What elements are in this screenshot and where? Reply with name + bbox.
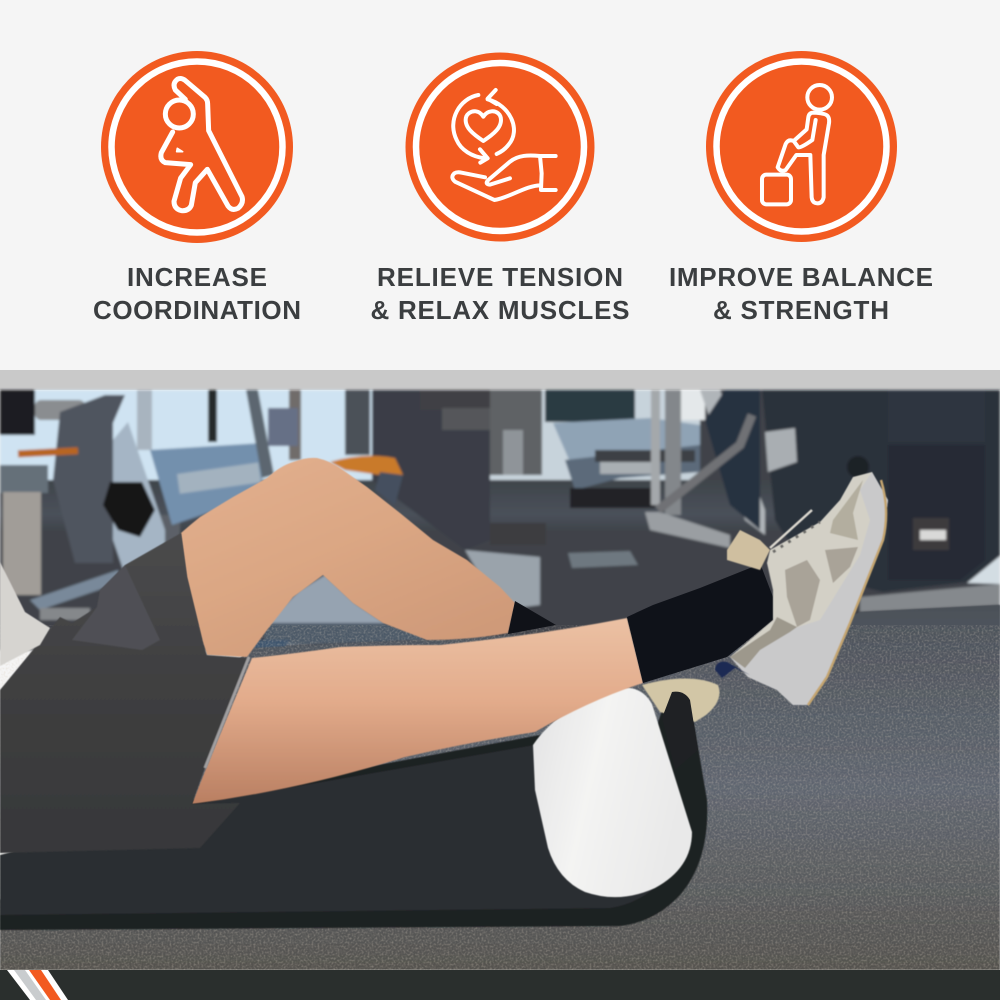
shorts [0,533,250,853]
tongue of shoe and laces [727,530,770,570]
heading line 2: strength: & STRENGTH [713,295,889,325]
mat curled edge [662,692,698,770]
heading: relieve tension: RELIEVE TENSION [377,262,623,292]
footer bar [0,970,1000,1000]
heading line 2: relax muscles: & RELAX MUSCLES [370,295,630,325]
icon: heart in hand [406,52,594,242]
sock [627,563,773,683]
lower leg [192,618,643,804]
grey divider band [0,370,1000,390]
icon: person stepping on box [706,51,897,242]
top panel background [0,0,1000,370]
foam roller [533,688,692,897]
heading: increase coordination: INCREASE [127,262,267,292]
garment at left [0,562,50,666]
heading line 2: coordination: COORDINATION [93,295,301,325]
logo stripes [7,970,68,1000]
heading: improve balance: IMPROVE BALANCE [669,262,933,292]
shoe behind roller [642,678,720,722]
icon: person stretching [101,51,293,243]
photo: carpet floor speckle [0,605,1000,970]
photo: gym background [0,390,1000,656]
upper leg sock [508,601,556,634]
upper bent leg [181,458,515,657]
exercise mat [0,692,707,930]
running shoe [715,472,888,705]
